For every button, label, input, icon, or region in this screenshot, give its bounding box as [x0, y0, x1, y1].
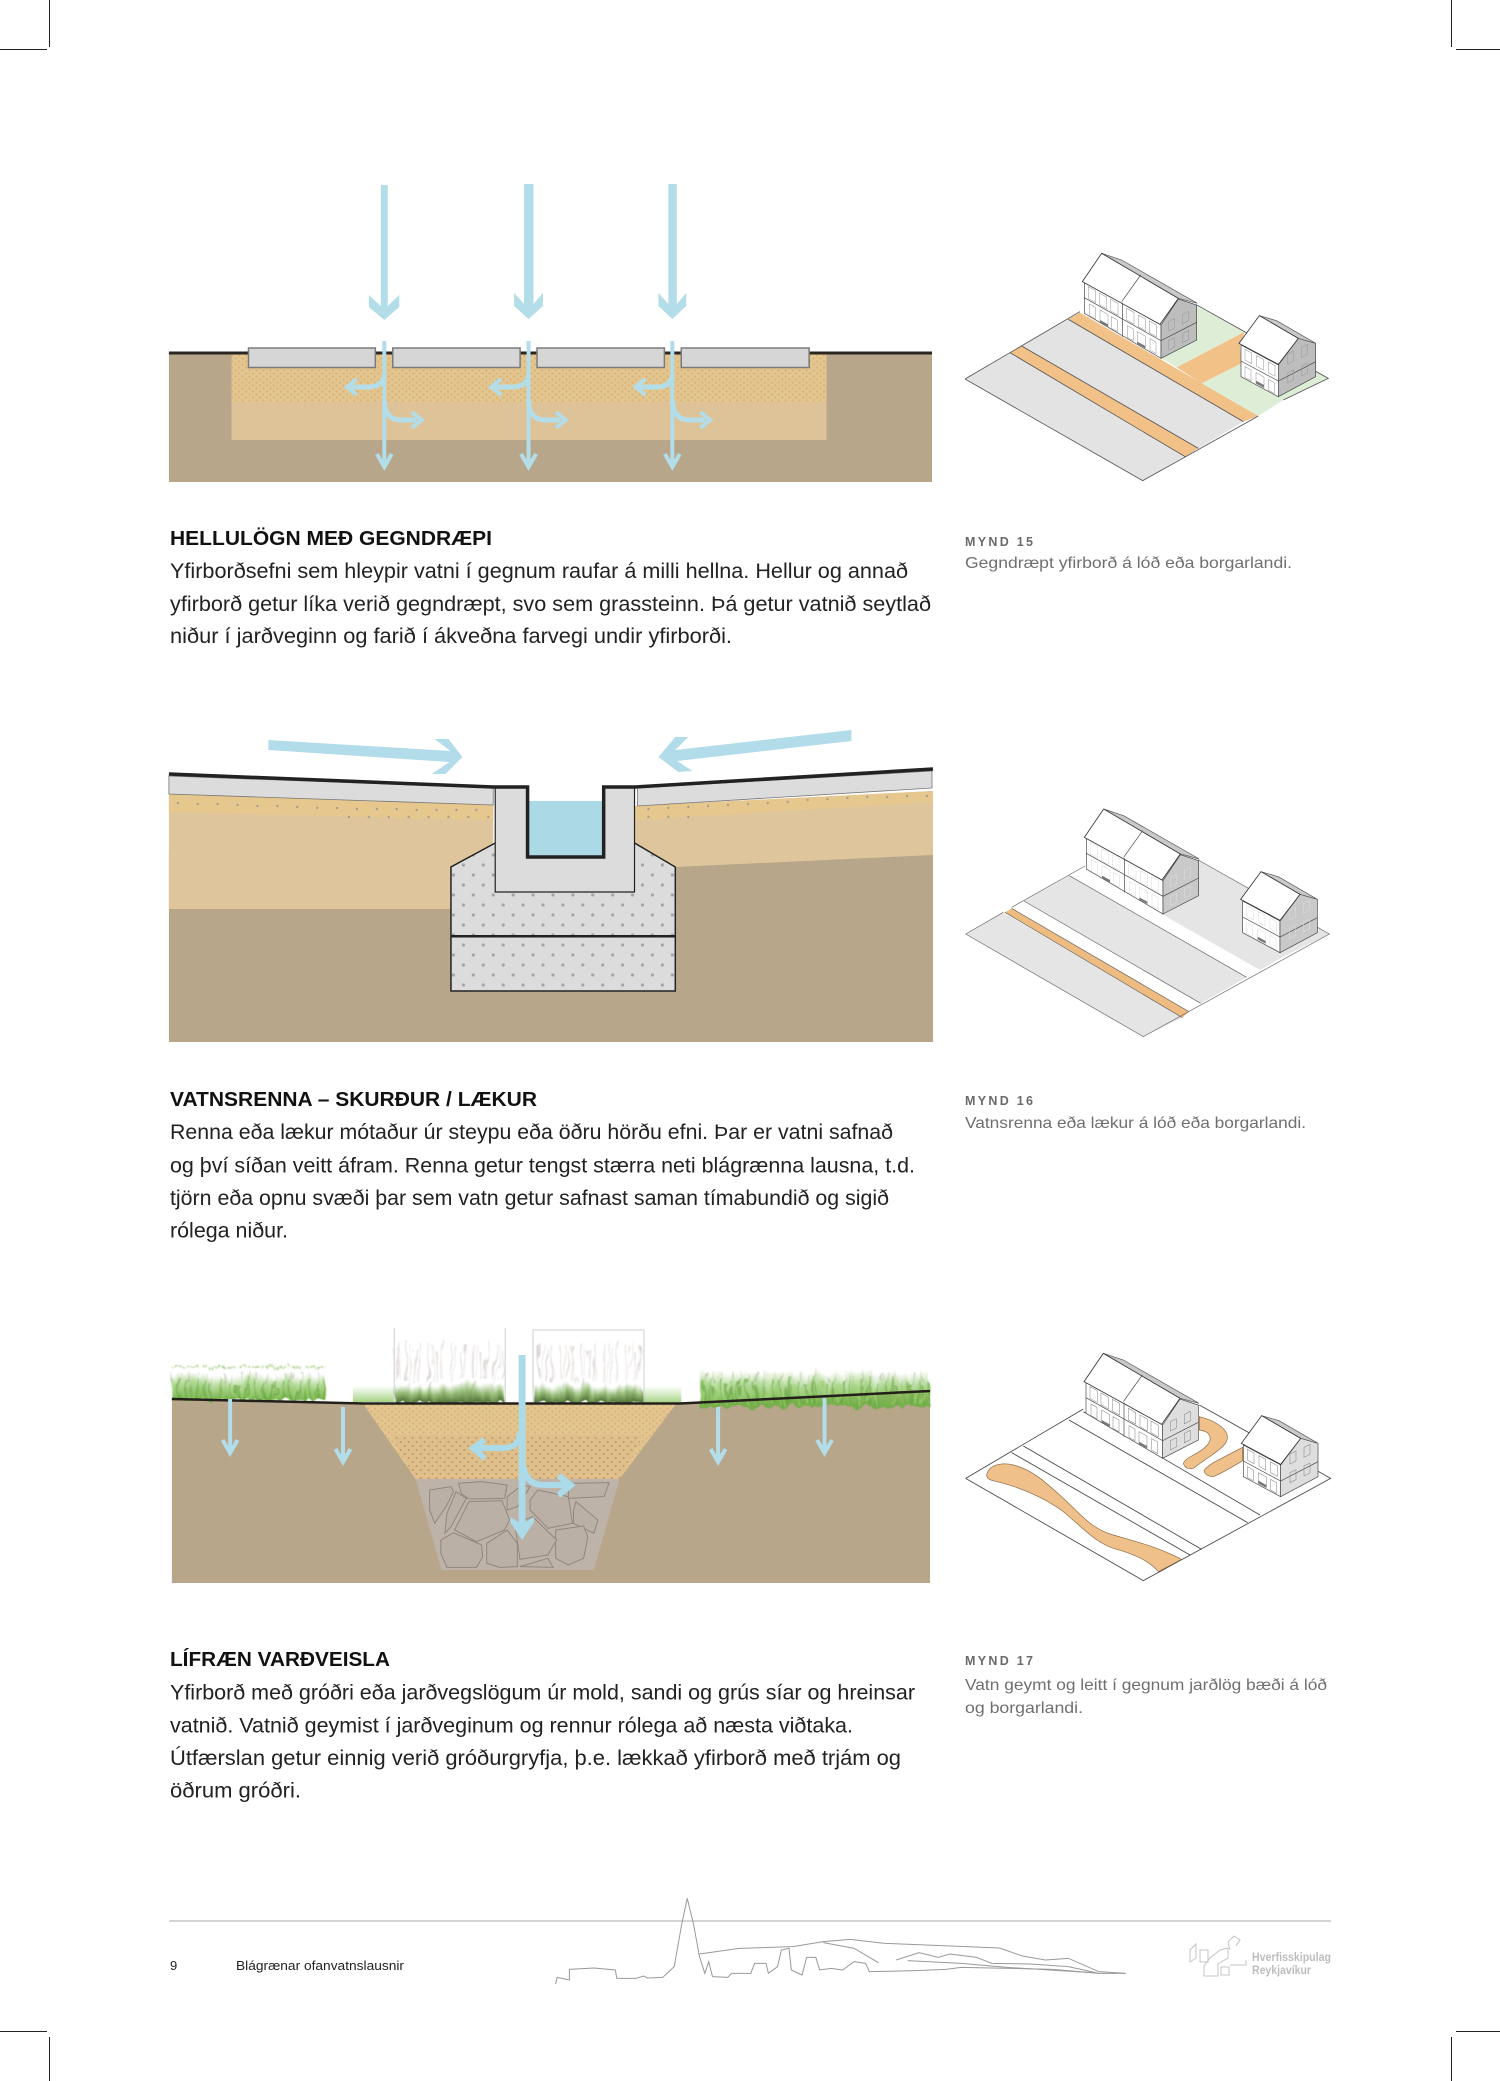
soil arrow 4 [817, 1398, 832, 1453]
rain arrow 1 [369, 185, 399, 320]
soil arrow 3 [711, 1407, 726, 1462]
body text: bioretention: Yfirborð með gróðri eða jarðvegslögum úr mold, sandi og grús síar og hreinsar [170, 1682, 915, 1704]
concrete channel [495, 787, 635, 892]
concrete foundation [451, 843, 675, 991]
arrow: left inflow [268, 739, 462, 774]
body text: channel: rólega niður. [170, 1220, 288, 1242]
footer: rule [169, 1920, 1331, 1922]
caption: MYND 17 [965, 1654, 1327, 1717]
heading: LÍFRÆN VARÐVEISLA: LÍFRÆN VARÐVEISLA [170, 1648, 390, 1671]
body text: bioretention: öðrum gróðri. [170, 1780, 301, 1802]
footer: publication title: Blágrænar ofanvatnslausnir [236, 1958, 405, 1973]
body text: paving: Yfirborðsefni sem hleypir vatni í gegnum raufar á milli hellna. Hellur og annað [170, 560, 908, 583]
swale [987, 1464, 1182, 1572]
logo mark [1190, 1936, 1246, 1976]
right pavement [638, 771, 932, 806]
grass: right [700, 1371, 930, 1407]
rain arrow 2 [514, 184, 543, 319]
panel: bioretention cross-section [172, 1328, 930, 1583]
panel: permeable paving cross-section [169, 184, 932, 482]
caption: MYND 16: MYND 16 [965, 1094, 1033, 1108]
infiltration arrows 3 [636, 341, 710, 467]
rain garden 1 [1183, 1417, 1227, 1469]
caption: MYND 17: MYND 17 [965, 1654, 1033, 1668]
soil arrow 2 [336, 1407, 350, 1462]
body text: bioretention [170, 1682, 915, 1802]
reeds: right clump [533, 1330, 644, 1403]
isometric diagram: permeable surface [965, 253, 1328, 481]
filter soil layers [363, 1404, 676, 1479]
footer: skyline with Hallgrímskirkja [556, 1898, 1126, 1984]
caption: MYND 17: og borgarlandi. [965, 1700, 1083, 1717]
body text: paving [170, 560, 931, 648]
panel: channel cross-section [169, 730, 933, 1042]
caption: MYND 15: MYND 15 [965, 535, 1033, 549]
caption: MYND 15: Gegndræpt yfirborð á lóð eða borgarlandi. [965, 555, 1292, 572]
water [528, 801, 604, 857]
rain garden 2 [1204, 1447, 1243, 1477]
body text: paving: niður í jarðveginn og farið í ákveðna farvegi undir yfirborði. [170, 625, 732, 648]
body text: paving: yfirborð getur líka verið gegndræpt, svo sem grassteinn. Þá getur vatnið seytlað [170, 593, 931, 616]
caption: MYND 16: Vatnsrenna eða lækur á lóð eða borgarlandi. [965, 1115, 1306, 1132]
isometric diagram: bioretention [966, 1353, 1331, 1581]
footer: logo: Hverfisskipulag [1252, 1952, 1331, 1964]
body text: bioretention: Útfærslan getur einnig verið gróðurgryfja, þ.e. lækkað yfirborð með trjám og [170, 1747, 901, 1770]
body text: channel: Renna eða lækur mótaður úr steypu eða öðru hörðu efni. Þar er vatni safnað [170, 1121, 893, 1144]
isometric diagram: channel [966, 809, 1329, 1037]
body text: channel [170, 1121, 915, 1242]
footer: logo [1190, 1936, 1331, 1977]
arrow: right inflow [658, 730, 851, 772]
infiltration arrows 1 [347, 341, 422, 467]
gravel and stones [416, 1479, 620, 1570]
body text: channel: og því síðan veitt áfram. Renna getur tengst stærra neti blágrænna lausna, t.d. [170, 1154, 915, 1178]
grass: light clumps [353, 1386, 681, 1403]
reeds: left clump [394, 1328, 505, 1403]
caption: MYND 16 [965, 1094, 1306, 1132]
footer: page number: 9 [170, 1958, 177, 1973]
body text: bioretention: vatnið. Vatnið geymist í jarðveginum og rennur rólega að næsta viðtaka. [170, 1714, 853, 1738]
footer: logo: Reykjavíkur [1252, 1965, 1311, 1977]
infiltration arrows 2 [491, 341, 566, 467]
body text: channel: tjörn eða opnu svæði þar sem vatn getur safnast saman tímabundið og sigið [170, 1187, 889, 1210]
left pavement [169, 776, 493, 805]
rain arrow 3 [658, 184, 686, 319]
caption: MYND 15 [965, 535, 1292, 572]
heading: VATNSRENNA: VATNSRENNA – SKURÐUR / LÆKUR [170, 1089, 538, 1111]
grass: left [172, 1366, 325, 1400]
heading: HELLULÖGN MEÐ GEGNDRÆPI: HELLULÖGN MEÐ GEGNDRÆPI [170, 527, 492, 550]
soil arrow 1 [223, 1399, 238, 1453]
main water arrow [468, 1355, 576, 1540]
caption: MYND 17: Vatn geymt og leitt í gegnum jarðlög bæði á lóð [965, 1677, 1327, 1694]
